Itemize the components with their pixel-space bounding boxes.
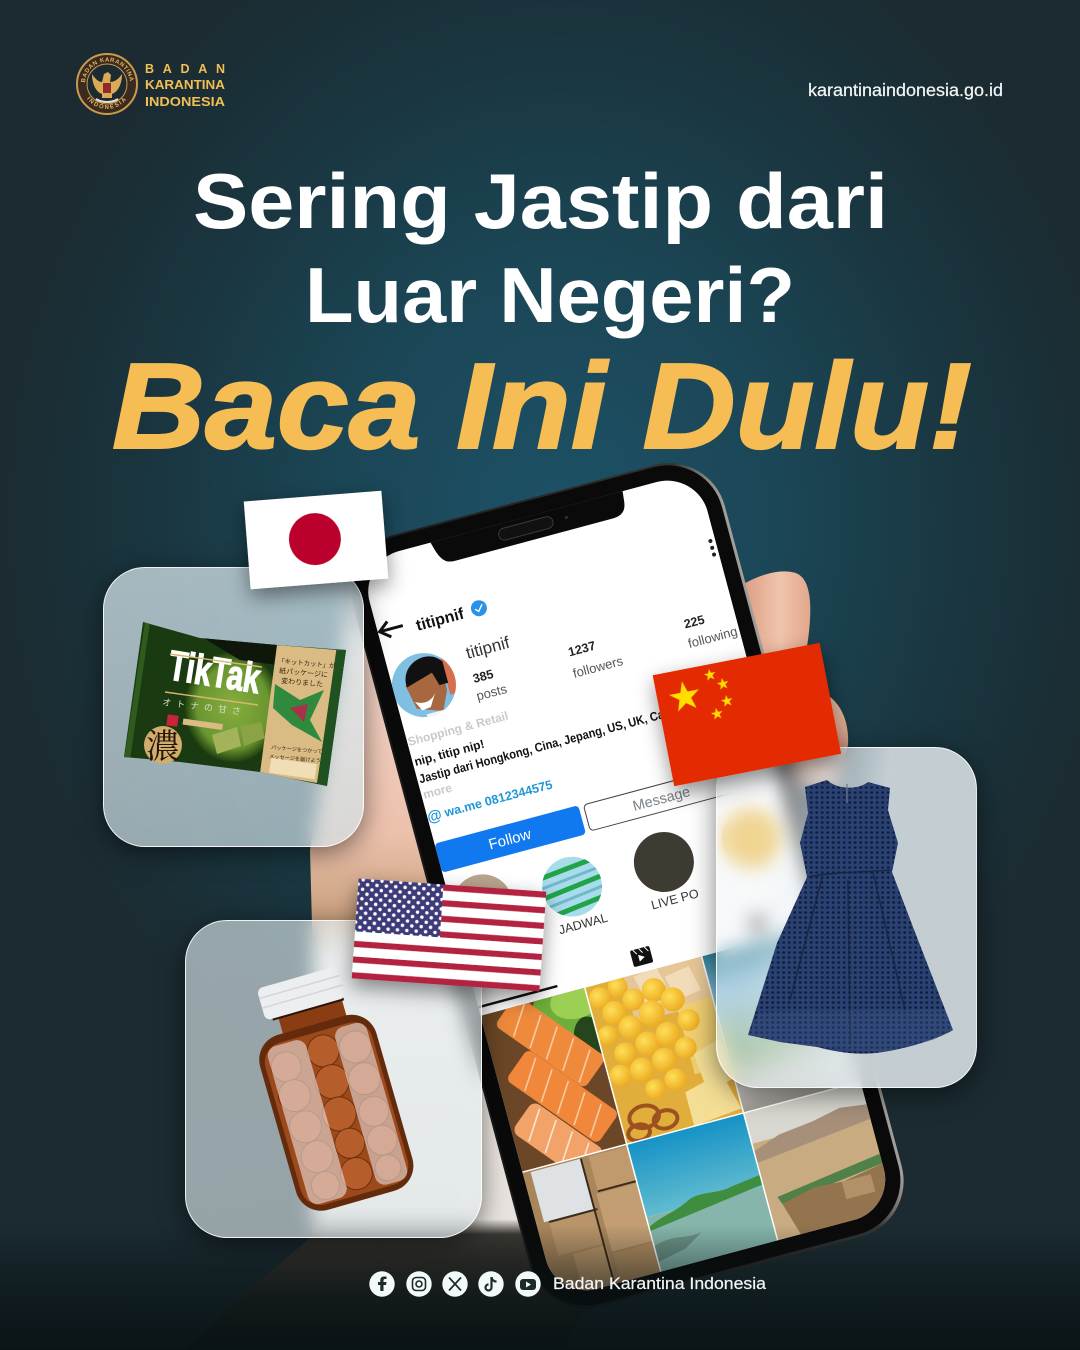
hand: lower finger bbox=[790, 689, 848, 790]
hand: palm and wrist bbox=[186, 560, 640, 1350]
footer social row bbox=[369, 1271, 767, 1297]
logo emblem: BADAN KARANTINA bbox=[80, 57, 134, 82]
product: TikTak matcha wafer pack: 濃 bbox=[146, 718, 180, 768]
profile stats: following bbox=[686, 623, 739, 651]
phone and hand layer bbox=[0, 463, 1080, 1350]
flag: China bbox=[653, 643, 841, 786]
product: TikTak matcha wafer pack: オトナの甘さ bbox=[161, 695, 246, 718]
profile stats: 1237 bbox=[567, 639, 597, 659]
product: TikTak matcha wafer pack: 「キットカット」が bbox=[277, 656, 336, 670]
flag: Japan bbox=[244, 491, 388, 589]
photo: sea bbox=[627, 1113, 778, 1272]
follow button: Follow bbox=[487, 826, 533, 853]
logo wordmark: INDONESIA bbox=[145, 95, 225, 109]
bio text bbox=[408, 711, 662, 824]
bio text: more bbox=[422, 781, 454, 802]
bio text: Jastip dari Hongkong, Cina, Jepang, US, UK, Canada bbox=[417, 700, 691, 786]
logo emblem bbox=[76, 53, 138, 115]
avatar bbox=[392, 653, 456, 718]
bio text: nip, titip nip! bbox=[413, 737, 486, 769]
product: TikTak matcha wafer pack: メッセージを届けよう bbox=[268, 753, 321, 764]
profile stats bbox=[466, 615, 738, 703]
logo wordmark: KARANTINA bbox=[145, 78, 225, 92]
tab icons bbox=[474, 913, 769, 1009]
logo bbox=[76, 53, 225, 115]
message button bbox=[584, 780, 732, 831]
footer label: Badan Karantina Indonesia bbox=[553, 1274, 767, 1293]
story highlights bbox=[459, 797, 792, 934]
icon: youtube bbox=[515, 1271, 541, 1297]
hand: upper finger bbox=[735, 571, 810, 690]
product: TikTak matcha wafer pack: 変わりました bbox=[280, 676, 323, 689]
title: Luar Negeri? bbox=[305, 251, 795, 339]
verified badge bbox=[470, 600, 487, 616]
product: TikTak matcha wafer pack bbox=[124, 622, 346, 786]
phone bbox=[338, 450, 917, 1321]
product: TikTak matcha wafer pack: TikTak bbox=[165, 641, 264, 702]
photo: snacks bbox=[584, 952, 748, 1144]
profile stats: posts bbox=[475, 681, 509, 704]
logo emblem: INDONESIA bbox=[87, 96, 126, 109]
panel: matcha snack glass card bbox=[103, 567, 364, 847]
phone body bbox=[338, 450, 917, 1321]
panel: clothing glass card bbox=[716, 747, 977, 1088]
profile stats: 225 bbox=[682, 613, 706, 631]
back arrow bbox=[378, 620, 404, 638]
logo wordmark bbox=[145, 62, 225, 109]
notch bbox=[430, 491, 624, 562]
photo: boxes bbox=[522, 1145, 661, 1290]
product: amber pill bottle bbox=[258, 969, 414, 1211]
story highlights: JADWAL bbox=[557, 911, 609, 937]
photo: right column upper bbox=[702, 924, 864, 1113]
photo grid bbox=[480, 922, 886, 1290]
title: Sering Jastip dari bbox=[193, 157, 888, 245]
icon: facebook bbox=[369, 1271, 395, 1297]
product: TikTak matcha wafer pack: 紙パッケージに bbox=[278, 666, 328, 680]
icon: X bbox=[442, 1271, 468, 1297]
icon: instagram bbox=[406, 1271, 432, 1297]
title: Baca Ini Dulu! bbox=[112, 338, 972, 474]
follow button bbox=[434, 805, 586, 873]
bottom dark fade bbox=[0, 1225, 1080, 1350]
profile stats: titipnif bbox=[464, 633, 512, 663]
profile name header: titipnif bbox=[414, 605, 467, 635]
profile stats: followers bbox=[571, 653, 625, 681]
logo wordmark: B A D A N bbox=[145, 62, 225, 76]
product: TikTak matcha wafer pack: パッケージをつかって bbox=[270, 744, 322, 755]
photo: salmon bbox=[480, 988, 626, 1172]
website url: karantinaindonesia.go.id bbox=[808, 80, 1003, 100]
icon: tiktok bbox=[478, 1271, 504, 1297]
message button: Message bbox=[631, 784, 692, 815]
title bbox=[112, 157, 972, 474]
photo: desert bbox=[744, 1088, 886, 1240]
grid separators bbox=[522, 956, 840, 1272]
product: navy eyelet dress bbox=[748, 780, 953, 1054]
bio text: Shopping & Retail bbox=[406, 709, 510, 749]
bio text: wa.me 0812344575 bbox=[442, 778, 554, 820]
panel: medicine glass card bbox=[185, 920, 482, 1238]
flag: United States bbox=[352, 879, 546, 991]
profile stats: 385 bbox=[471, 667, 495, 686]
menu dots bbox=[708, 539, 716, 557]
bio text: @ bbox=[425, 806, 444, 826]
story highlights: LIVE PO bbox=[650, 886, 701, 912]
phone screen bbox=[355, 462, 899, 1302]
